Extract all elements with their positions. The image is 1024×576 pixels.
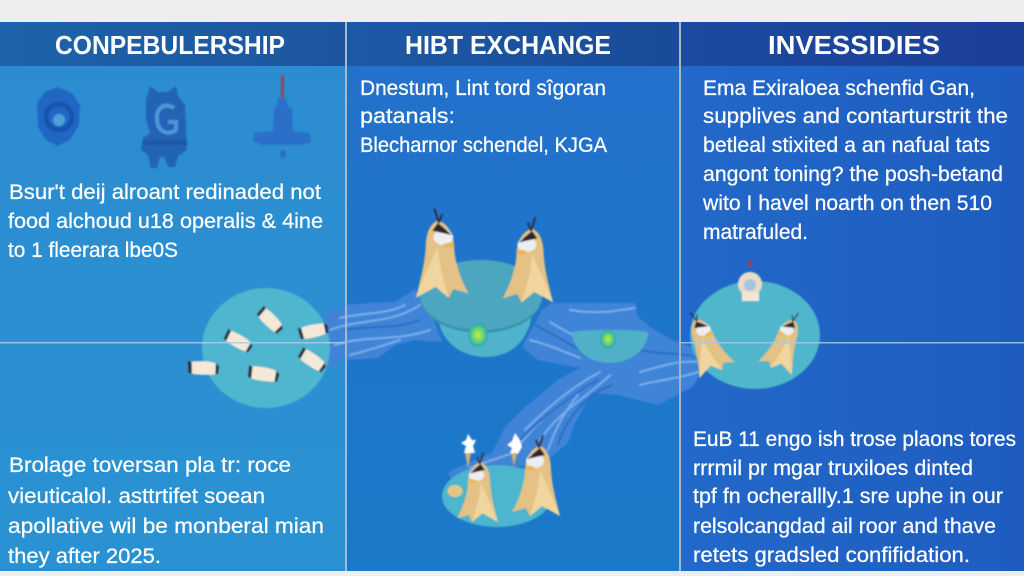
icon: tower — [253, 75, 311, 158]
water: right ribbon — [522, 303, 702, 405]
white marker right — [507, 433, 522, 466]
text block: right upper: supplives and contarturstrit the — [703, 105, 1008, 128]
text block: right lower: EuB 11 engo ish trose plaons tores — [693, 428, 1016, 451]
text block: left lower: vieuticalol. asttrtifet soean — [8, 485, 265, 508]
text block: centre: Dnestum, Lint tord sîgoran — [360, 77, 606, 100]
panel: right background — [681, 22, 1024, 571]
sheep 5 — [247, 365, 280, 384]
heading: centre: HIBT EXCHANGE — [405, 30, 611, 60]
panel: centre header bar — [347, 22, 679, 66]
heading: right: INVESSIDIES — [768, 30, 940, 60]
island: centre small — [572, 330, 648, 363]
sheep 1 — [255, 305, 285, 335]
figure: right right — [758, 306, 811, 375]
horizontal guide line, left — [0, 342, 345, 344]
text block: right lower — [693, 428, 1016, 567]
panel: centre background — [347, 22, 679, 571]
water: lower branch — [448, 365, 625, 490]
icon: currency figure — [141, 86, 187, 168]
water ribbons connecting the islands — [325, 289, 702, 490]
text block: left upper: to 1 fleerara lbe0S — [8, 239, 178, 262]
water: dark strands — [345, 320, 700, 445]
text block: right upper: angont toning? the posh-betand — [703, 163, 1003, 186]
text block: right lower: relsolcangdad ail roor and thave — [693, 515, 996, 538]
gem: small platform — [600, 330, 616, 348]
figure: bottom left — [457, 453, 498, 522]
figure: bottom right — [512, 435, 560, 516]
water: light strands — [330, 305, 700, 468]
panel divider, right — [679, 22, 681, 571]
heading: left: CONPEBULERSHIP — [55, 30, 285, 60]
figure: right left — [677, 304, 736, 378]
text block: centre: patanals: — [360, 105, 455, 128]
sheep 4 — [296, 346, 328, 374]
gem: centre platform — [468, 323, 488, 347]
sheep 2 — [222, 328, 254, 354]
island: centre upper stacked platforms — [416, 209, 553, 357]
text block: centre — [360, 77, 607, 157]
figure: centre left — [416, 209, 469, 298]
text block: left lower — [8, 454, 324, 568]
text block: left lower: apollative wil be monberal mian — [8, 515, 324, 538]
figure: centre right — [503, 217, 553, 302]
water: left ribbon — [325, 289, 442, 368]
text block: right lower: tpf fn ocherallly.1 sre uphe in our — [693, 485, 1003, 508]
text block: right lower: rrrmil pr mgar truxiloes dinted — [693, 457, 973, 480]
text block: right lower: retets gradsled confifidation. — [693, 544, 970, 567]
panel: left background — [0, 22, 345, 571]
island: centre bottom — [442, 433, 560, 527]
sheep 6 — [187, 360, 220, 376]
small top figure — [738, 260, 762, 301]
text block: left upper: food alchoud u18 operalis & 4ine — [8, 210, 323, 233]
icon: shield — [37, 87, 80, 146]
rock — [448, 485, 462, 497]
island: left with sheep — [187, 288, 330, 408]
text block: right upper: betleal stixited a an nafual tats — [703, 134, 990, 157]
sheep 3 — [298, 322, 329, 340]
text block: right upper: Ema Exiraloea schenfid Gan, — [703, 77, 975, 100]
panel: right header bar — [681, 22, 1024, 66]
text block: centre: Blecharnor schendel, KJGA — [360, 134, 607, 157]
panel divider, left — [345, 22, 347, 571]
white marker left — [461, 434, 476, 468]
text block: left upper: Bsur't deij alroant redinaded not — [9, 181, 321, 204]
text block: left lower: Brolage toversan pla tr: roce — [9, 454, 291, 477]
horizontal guide line, right — [681, 342, 1024, 344]
text block: right upper: matrafuled. — [703, 221, 808, 244]
text block: right upper: wito I havel noarth on then 510 — [702, 192, 992, 215]
text block: left upper — [8, 181, 323, 262]
text block: right upper — [702, 77, 1008, 244]
text block: left lower: they after 2025. — [8, 545, 161, 568]
island: right — [677, 260, 820, 389]
panel: left header bar — [0, 22, 345, 66]
